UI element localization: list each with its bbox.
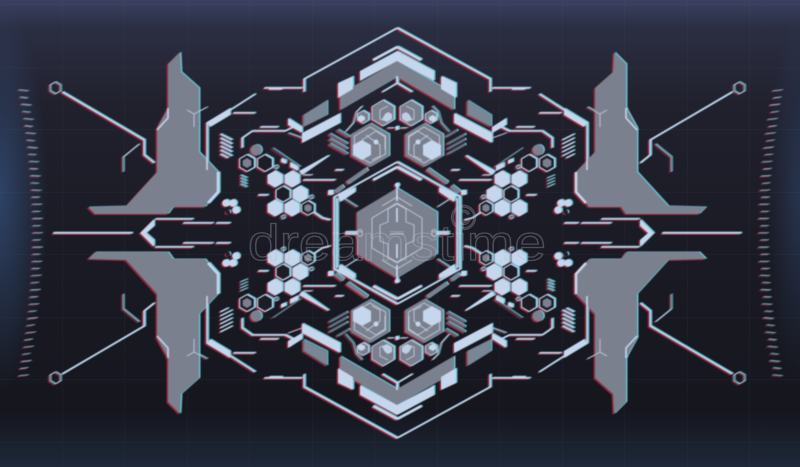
Y glyph on wing — [187, 107, 207, 127]
upper outlined hexagons — [240, 144, 272, 172]
quadrant: top-right mirror — [395, 28, 744, 234]
central hexagon frame — [334, 162, 397, 234]
ruler: right ticks — [758, 90, 782, 376]
wing light edges — [157, 89, 282, 203]
honeycomb circuit traces — [242, 126, 302, 195]
honeycomb: dark and grey cells — [276, 186, 314, 215]
centre spine marker — [387, 126, 398, 130]
small Y glyph — [382, 76, 397, 92]
hex cluster: small hexagon — [345, 106, 369, 132]
centre arrow and bars — [53, 219, 230, 233]
hex probe line — [50, 82, 154, 172]
quadrant: bottom-right mirror — [395, 232, 744, 438]
honeycomb: filled cells — [268, 170, 307, 217]
small hex trio — [222, 199, 240, 214]
connector bars — [299, 155, 367, 195]
grey wing shape — [88, 52, 218, 214]
watermark text: © — [451, 199, 476, 237]
central wire emblem — [343, 183, 399, 234]
watermark text — [248, 199, 546, 271]
central grey hexagon — [357, 188, 397, 234]
ruler: left ticks — [18, 90, 42, 376]
striped gauge beside large hexagon — [329, 130, 349, 154]
striped gauge cyan — [240, 175, 247, 187]
hex cluster: medium hexagon — [372, 100, 394, 126]
watermark text: dreamstime — [248, 215, 546, 271]
quadrant: bottom-left mirror — [50, 232, 399, 438]
honeycomb nodes and tail — [274, 165, 330, 220]
chevron armour plates — [288, 51, 397, 143]
outer chevron frame — [264, 28, 397, 92]
quadrant: top-left source artwork — [50, 28, 399, 234]
striped gauge light — [220, 134, 232, 158]
top small chevron bar — [373, 47, 397, 60]
hex cluster: large hexagon — [351, 123, 389, 167]
